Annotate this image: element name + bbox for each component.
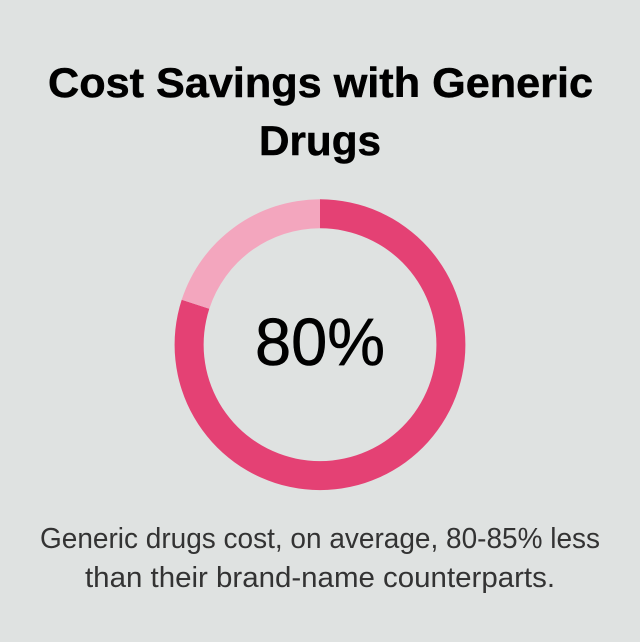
remaining segment: 20% [182,199,320,309]
title [48,59,593,164]
title: Cost Savings with Generic [48,59,593,106]
main segment: 80% [175,199,465,490]
caption: than their brand-name counterparts. [85,562,555,594]
caption: Generic drugs cost, on average, 80-85% less [40,523,600,555]
center value: 80% [255,305,385,380]
donut chart: 80% [175,199,465,490]
title: Drugs [259,117,381,164]
caption [40,523,600,594]
